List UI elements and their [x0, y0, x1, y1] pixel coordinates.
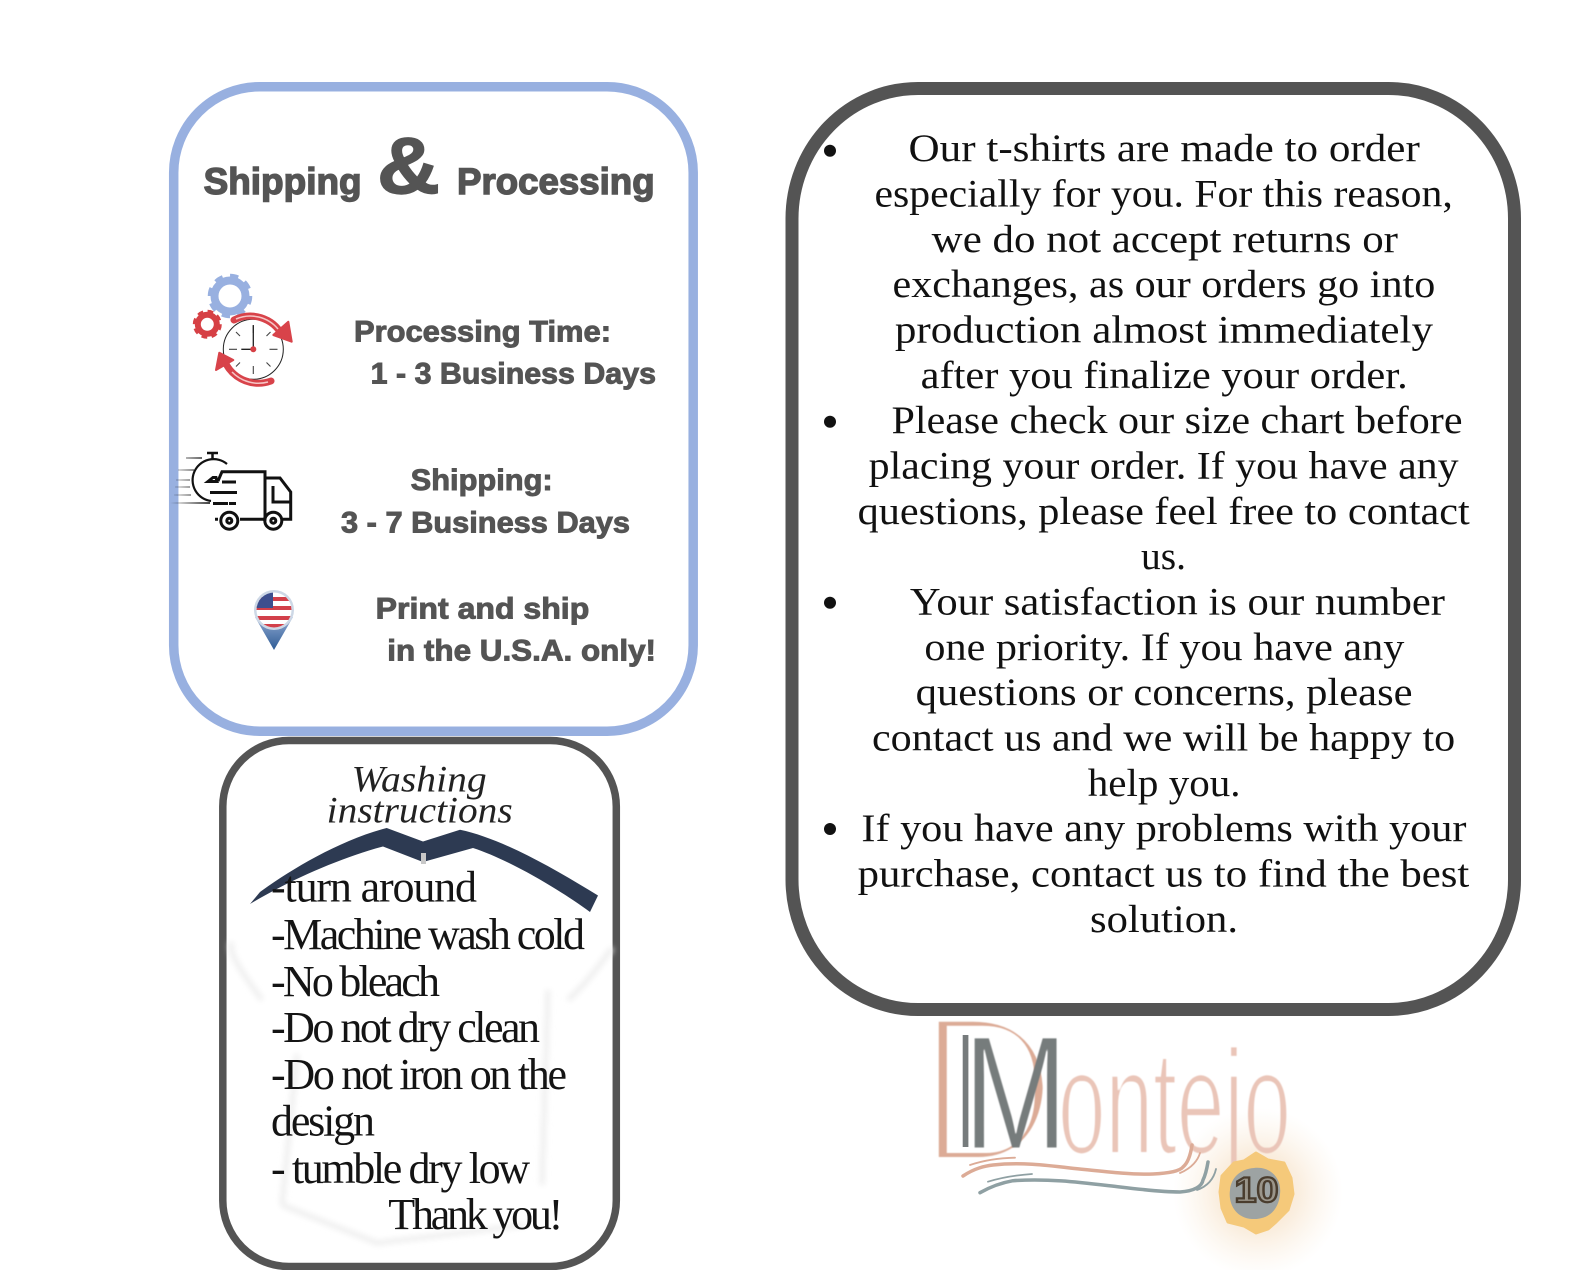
bullet list: policy text: we do not accept returns or — [932, 218, 1398, 261]
bullet list: policy text: placing your order. If you have any — [869, 444, 1459, 488]
logo wordmark: ontejo — [1058, 1018, 1291, 1186]
bullet list: policy text: purchase, contact us to find the best — [858, 852, 1469, 896]
text: processing time: Processing Time: — [354, 316, 611, 349]
text: processing time: 1 - 3 Business Days — [371, 357, 656, 390]
logo wordmark — [918, 971, 1291, 1209]
bullet list: policy text: questions, please feel free to contact — [858, 490, 1470, 533]
icon: gears and clock — [195, 276, 292, 383]
logo swashes — [963, 1145, 1216, 1193]
bullet list: policy text — [824, 127, 1470, 941]
text: washing steps: -turn around — [271, 862, 477, 912]
heading: washing instructions: instructions — [327, 790, 513, 832]
heading: washing instructions: Washing — [352, 759, 487, 800]
heading: shipping and processing — [204, 121, 655, 210]
text: shipping time — [341, 464, 630, 539]
bullet list: policy text: Our t-shirts are made to order — [908, 127, 1420, 170]
bullet list: policy text: contact us and we will be happy to — [872, 716, 1455, 760]
bullet list: policy text: one priority. If you have any — [924, 626, 1405, 669]
bullet list: policy text: exchanges, as our orders go into — [892, 263, 1435, 306]
heading: shipping and processing: Processing — [457, 161, 655, 202]
panel: washing instructions — [223, 740, 616, 1266]
text: shipping time: Shipping: — [411, 464, 553, 497]
text: print and ship: in the U.S.A. only! — [387, 635, 656, 668]
t-shirt image — [231, 828, 612, 1243]
text: washing steps — [271, 862, 585, 1239]
logo seal: 10 — [1220, 1153, 1293, 1233]
bullet list: policy text: especially for you. For this reason, — [874, 172, 1453, 216]
bullet list: policy text: after you finalize your order. — [921, 354, 1408, 397]
bullet list: policy text: Your satisfaction is our number — [910, 580, 1445, 624]
logo wordmark: D — [918, 971, 1057, 1209]
bullet list: policy text: help you. — [1088, 762, 1240, 805]
text: washing steps: Thank you! — [388, 1190, 563, 1239]
icon: USA flag map pin — [254, 590, 294, 650]
bullet list: policy text: solution. — [1090, 898, 1238, 941]
text: processing time — [354, 316, 656, 390]
infographic canvas — [168, 82, 1521, 1270]
bullet list: policy text: us. — [1141, 535, 1186, 578]
heading: shipping and processing: & — [377, 121, 440, 210]
bullet list: policy text: If you have any problems with your — [861, 807, 1466, 850]
text: print and ship: Print and ship — [376, 592, 589, 625]
bullet list: policy text: Please check our size chart before — [892, 399, 1462, 442]
text: shipping time: 3 - 7 Business Days — [341, 506, 630, 539]
heading: shipping and processing: Shipping — [204, 161, 362, 202]
text: washing steps: design — [271, 1097, 375, 1146]
text: washing steps: -Machine wash cold — [271, 910, 585, 959]
heading: washing instructions — [327, 759, 513, 832]
logo wordmark: M — [964, 1002, 1067, 1184]
bullet list: policy text: production almost immediately — [895, 308, 1434, 352]
icon: delivery truck with stopwatch — [170, 453, 291, 529]
text: print and ship — [376, 592, 656, 668]
bullet list: policy text: questions or concerns, please — [916, 671, 1413, 714]
panel: store policy — [792, 88, 1514, 1010]
text: washing steps: -Do not dry clean — [271, 1003, 540, 1052]
text: washing steps: - tumble dry low — [271, 1144, 530, 1193]
text: washing steps: -No bleach — [271, 957, 440, 1006]
panel: shipping and processing — [170, 87, 693, 731]
text: washing steps: -Do not iron on the — [271, 1050, 567, 1099]
logo seal: 10: 10 — [1234, 1171, 1278, 1210]
logo: DMontejo 10 — [918, 971, 1343, 1270]
